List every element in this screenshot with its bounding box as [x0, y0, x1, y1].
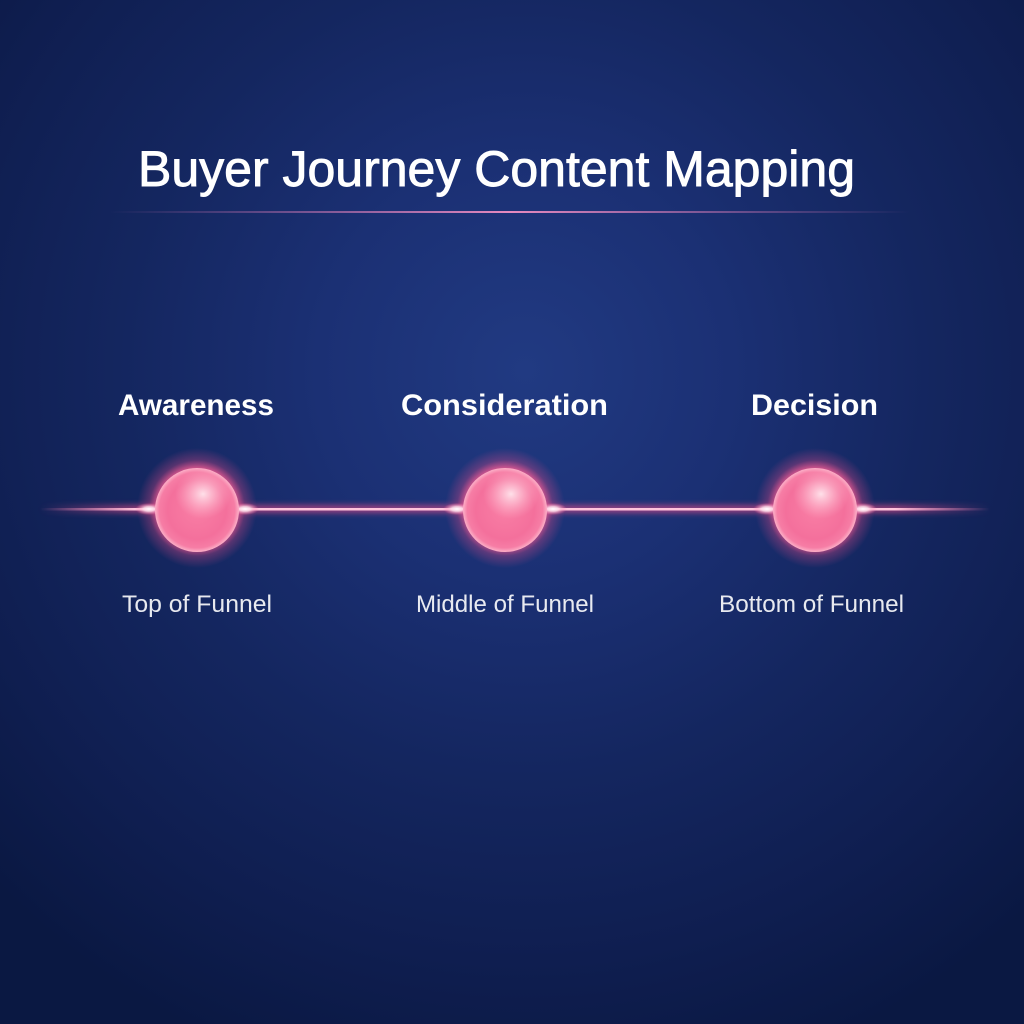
funnel label: Middle of Funnel: Middle of Funnel	[416, 591, 594, 618]
stage label: Consideration: Consideration	[401, 389, 608, 422]
timeline line	[40, 505, 990, 513]
stage label: Decision: Decision	[751, 389, 878, 422]
stage label: Awareness: Awareness	[118, 389, 274, 422]
node: Decision sphere	[753, 448, 877, 568]
stage: Decision	[719, 389, 904, 618]
funnel label: Bottom of Funnel: Bottom of Funnel	[719, 591, 904, 618]
title: Buyer Journey Content Mapping	[138, 141, 855, 197]
stage: Awareness	[118, 389, 274, 618]
funnel label: Top of Funnel: Top of Funnel	[122, 591, 272, 618]
node: Consideration sphere	[443, 448, 567, 568]
title underline	[110, 211, 910, 213]
node: Awareness sphere	[135, 448, 259, 568]
stage: Consideration	[401, 389, 608, 618]
